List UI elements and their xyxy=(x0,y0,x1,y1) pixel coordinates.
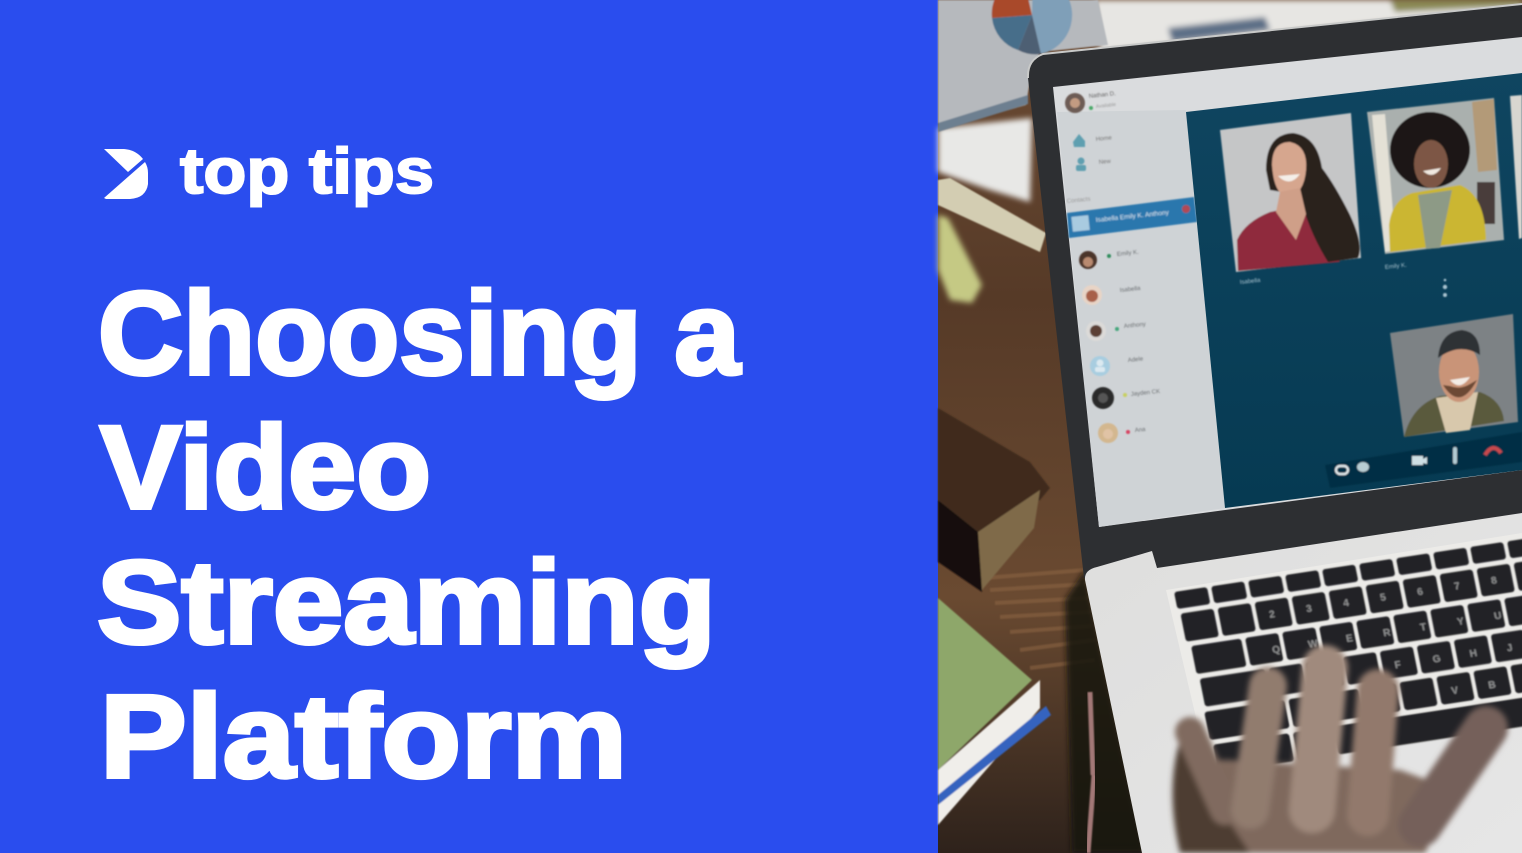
contact names: Isabella xyxy=(1120,286,1141,294)
screen: contact list xyxy=(1079,250,1160,443)
key legends: 7 xyxy=(1453,581,1461,592)
key legends: 8 xyxy=(1490,575,1498,587)
title: Choosing a Video Streaming Platform: Platform xyxy=(100,671,627,803)
pinky finger xyxy=(1190,732,1225,810)
call toolbar with icons xyxy=(1325,432,1522,488)
number row xyxy=(1180,558,1522,642)
bottom row and spacebar xyxy=(1213,689,1522,773)
participant labels and pagination xyxy=(1240,263,1447,297)
patterned top xyxy=(1418,190,1452,249)
contact avatars xyxy=(1079,251,1118,443)
contact names: Ana xyxy=(1135,427,1146,434)
smile xyxy=(1423,168,1441,175)
middle finger xyxy=(1312,668,1325,810)
photo: laptop video call on a wooden desk xyxy=(938,0,1522,853)
shadow beside laptop xyxy=(1065,570,1145,853)
key legends: G xyxy=(1432,654,1442,666)
title: Choosing a Video Streaming Platform: Video xyxy=(100,402,431,534)
screen: teal video area xyxy=(1186,73,1522,508)
participant labels and pagination: Isabella xyxy=(1240,278,1261,286)
key legends: U xyxy=(1493,611,1503,622)
laptop base xyxy=(1085,513,1522,853)
screen: active call row xyxy=(1067,197,1197,238)
screen: profile header xyxy=(1065,91,1117,113)
key legends: B xyxy=(1487,679,1497,691)
wood grain xyxy=(985,570,1095,668)
key legends: 2 xyxy=(1268,609,1276,621)
key legends: H xyxy=(1469,648,1478,660)
left panel: blue background xyxy=(0,0,938,853)
key legends: Q xyxy=(1271,644,1281,656)
shift row xyxy=(1204,661,1522,740)
video tile: laughing man with cap xyxy=(1390,314,1518,437)
key legends: W xyxy=(1307,638,1319,651)
key legends: T xyxy=(1419,622,1428,634)
key legends xyxy=(1264,573,1522,722)
key legends: 3 xyxy=(1305,603,1313,615)
desk: wooden surface xyxy=(938,0,1522,853)
hair xyxy=(1266,133,1360,262)
key legends: 5 xyxy=(1379,592,1387,604)
wooden block xyxy=(938,408,1050,592)
laptop screen bezel xyxy=(1028,4,1522,578)
yellow cardigan xyxy=(1389,185,1486,252)
contact status dots xyxy=(1107,254,1130,434)
key legends: R xyxy=(1382,627,1392,639)
participant labels and pagination: Emily K. xyxy=(1385,263,1407,271)
video tile: woman with yellow cardigan xyxy=(1367,98,1504,254)
shirt xyxy=(1404,392,1504,437)
screen: profile header: Nathan D. xyxy=(1089,91,1116,100)
face xyxy=(1439,342,1479,402)
document with pie chart xyxy=(938,0,1108,132)
key legends: E xyxy=(1345,633,1354,645)
title: Choosing a Video Streaming Platform: Streaming xyxy=(97,537,716,669)
ring finger xyxy=(1250,686,1268,810)
red blouse xyxy=(1237,205,1340,271)
key legends: J xyxy=(1506,643,1514,655)
contact names: Emily K. xyxy=(1117,250,1139,258)
title: Choosing a Video Streaming Platform: Choosing a xyxy=(98,268,741,400)
charging cable xyxy=(1088,692,1094,853)
ruler xyxy=(938,178,1046,252)
label: top tips: top tips xyxy=(180,135,434,207)
screen: active call row: Isabella Emily K. Anthony xyxy=(1095,209,1170,224)
screen: sidebar panel xyxy=(1057,110,1225,527)
key legends: F xyxy=(1394,660,1402,672)
contact names: Adele xyxy=(1128,356,1144,364)
highlighter marker xyxy=(938,215,982,303)
home row xyxy=(1200,630,1522,707)
keyboard well xyxy=(1166,533,1522,768)
green book xyxy=(938,598,1051,825)
screen: navigation items: Home xyxy=(1096,135,1113,143)
screen: navigation items: New xyxy=(1099,159,1112,166)
desk: blurred papers and white desk area xyxy=(938,0,1522,202)
contact names: Jayden CK xyxy=(1131,389,1160,398)
smile xyxy=(1278,174,1300,182)
bezel edge highlight xyxy=(1028,4,1522,78)
top letter row xyxy=(1191,593,1522,674)
video tile: partly visible at the right edge xyxy=(1510,95,1522,239)
key legends: 4 xyxy=(1342,598,1350,609)
pie chart slices xyxy=(992,0,1072,54)
face xyxy=(1414,140,1448,188)
title: Choosing a Video Streaming Platform xyxy=(97,268,741,803)
face and neck xyxy=(1272,142,1306,197)
screen: profile header: Available xyxy=(1096,102,1117,110)
typing hand xyxy=(1172,668,1486,853)
afro hair xyxy=(1390,112,1470,188)
key legends: 6 xyxy=(1416,586,1424,598)
contact names xyxy=(1117,250,1160,434)
index finger xyxy=(1368,690,1378,815)
palm xyxy=(1180,760,1455,853)
key legends: V xyxy=(1450,685,1459,697)
screen: navigation items xyxy=(1067,134,1113,205)
key legends: Y xyxy=(1456,616,1465,628)
video tile: woman with long dark hair xyxy=(1220,113,1361,272)
contact names: Anthony xyxy=(1124,322,1146,330)
screen: app window xyxy=(1053,37,1522,527)
cap xyxy=(1438,330,1480,358)
thumb xyxy=(1420,728,1486,825)
beard and smile xyxy=(1443,380,1477,397)
dark shadow along hand xyxy=(1172,740,1250,853)
function row xyxy=(1174,536,1522,609)
keyboard keys xyxy=(1174,535,1522,774)
screen: navigation items: Contacts xyxy=(1067,197,1091,205)
logo: white arrow mark xyxy=(104,149,148,199)
